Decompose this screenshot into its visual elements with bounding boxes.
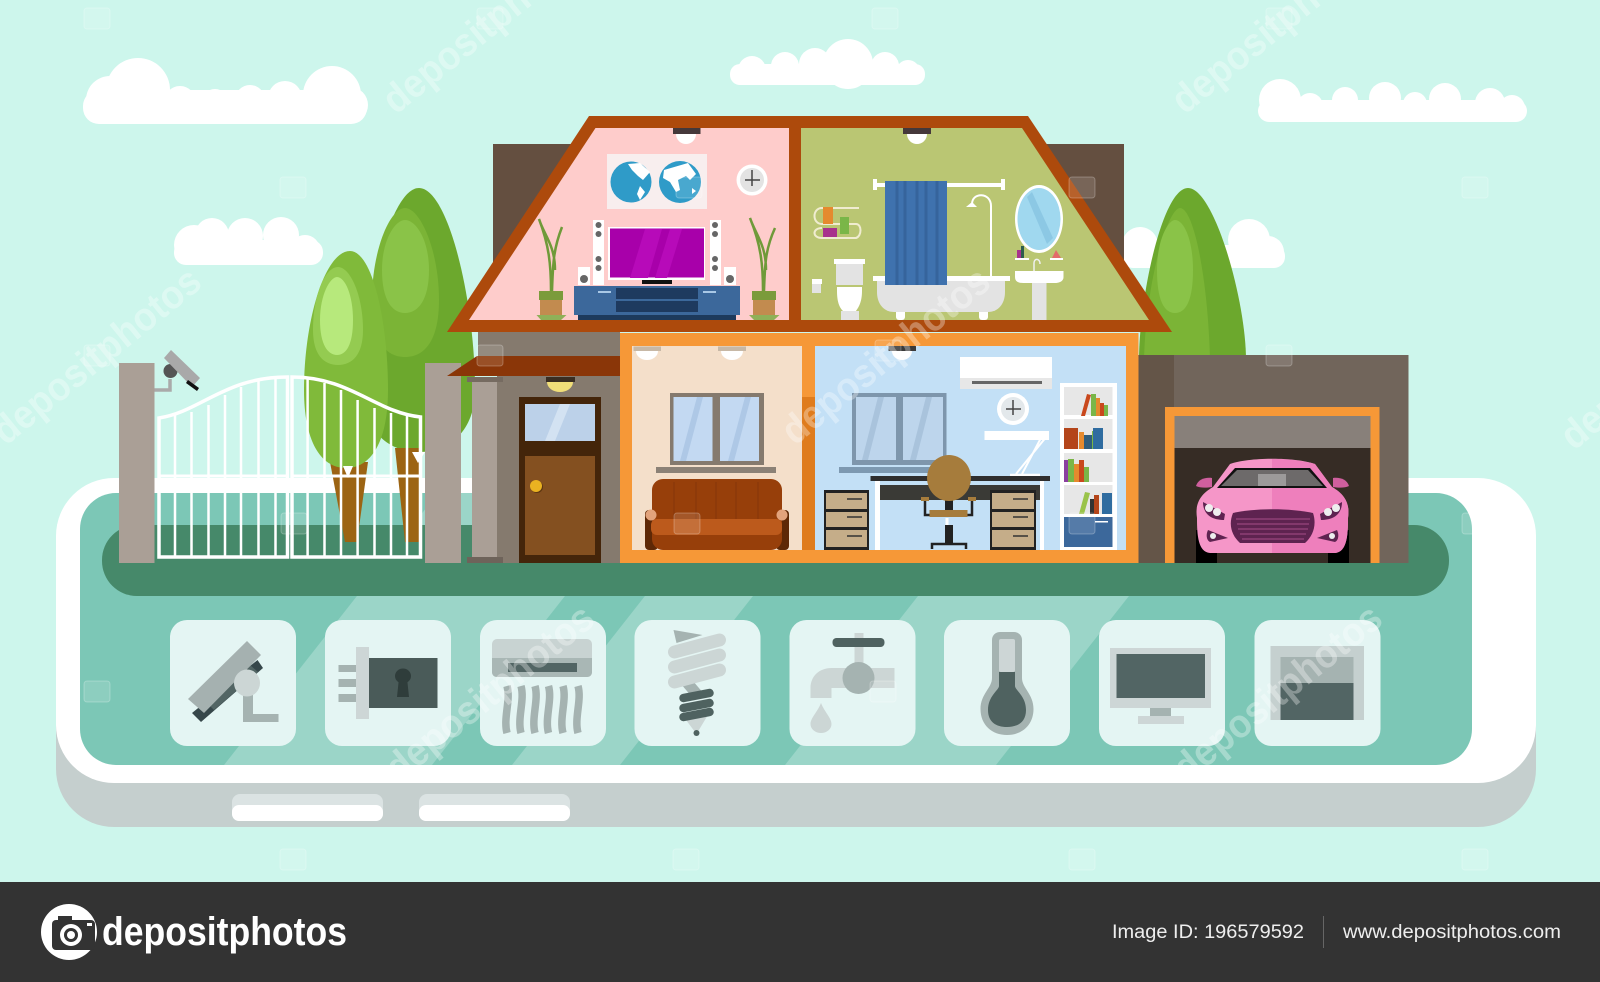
gate post left [119,363,154,563]
bookcase [1060,383,1117,550]
plant left [536,219,566,320]
air conditioner [960,357,1052,389]
logo icon [41,904,97,960]
tile: thermometer [944,620,1070,746]
cloud top left [83,58,368,124]
roof [447,116,1172,332]
image id: Image ID: 196579592 [1112,922,1304,943]
curtain and rail [873,179,1005,285]
plant right [749,218,780,320]
porch awning [447,356,620,376]
garage [1138,355,1408,563]
ground floor frame [620,333,1138,563]
cloud middle left [174,217,323,265]
roof centre beam [789,128,801,320]
shower [972,195,991,277]
tile: air conditioner [480,620,606,746]
tile: light bulb [634,620,760,746]
office chair [921,455,976,549]
phone screen [80,493,1472,765]
smart home icon tiles [170,620,1380,746]
room divider [802,346,815,550]
bathroom lamp [903,128,931,144]
attic lamp [673,128,700,144]
tile: water tap [790,620,916,746]
speakers [578,220,736,285]
gate [159,377,420,557]
cloud middle right [1122,219,1285,268]
tree small left [304,251,388,542]
cloud top centre [730,39,925,89]
drawers right [990,490,1036,550]
website: www.depositphotos.com [1342,922,1561,943]
watermark camera marks [84,8,1488,870]
pink car [1196,459,1349,563]
watermarks: depositphotos [377,596,603,790]
tree big left [363,188,475,542]
tile: smart lock [325,620,451,746]
gate post right [425,363,461,563]
office clock [997,393,1029,425]
attic clock [736,164,768,196]
gate ornaments [343,452,425,478]
tree right [1139,188,1246,360]
ground strip [102,525,1449,596]
sink [1015,259,1064,320]
tile: garage [1254,620,1380,746]
cloud top right [1258,79,1527,122]
tv cabinet [574,286,740,320]
tile: security camera [170,620,296,746]
mirror [1015,185,1063,253]
office [815,346,1126,550]
porch lamp [546,377,575,392]
toilet [834,259,865,320]
porch column [467,377,503,563]
toilet paper [812,279,822,293]
living room [632,346,802,550]
phone button one [232,794,383,821]
watermarks: depositphotos [1165,596,1391,790]
towel rail [814,207,860,238]
books [1064,394,1112,514]
tree right highlight [1144,208,1210,360]
right chimney wall [1030,144,1124,262]
logo wordmark: depositphotos [102,910,347,954]
sofa [645,479,789,550]
desk [870,476,1050,550]
cosmetics [1015,246,1063,260]
tile: monitor [1099,620,1225,746]
shower head [966,202,977,207]
living room window [656,393,776,473]
desk lamp [984,431,1049,475]
watermarks: depositphotos [773,259,999,453]
drawers left [824,490,869,550]
phone device [56,478,1536,827]
bathtub [873,276,1010,320]
security camera [154,350,200,391]
left chimney wall [493,144,593,266]
front door [519,397,601,563]
ceiling lamps [634,346,746,360]
footer bar [0,882,1600,982]
living room attic [469,128,789,320]
office window [839,393,958,473]
porch and entrance [447,332,620,563]
phone button two [419,794,570,821]
world maps poster [607,154,707,209]
bathroom [801,128,1149,320]
television [608,227,705,284]
office lamp [888,346,916,360]
